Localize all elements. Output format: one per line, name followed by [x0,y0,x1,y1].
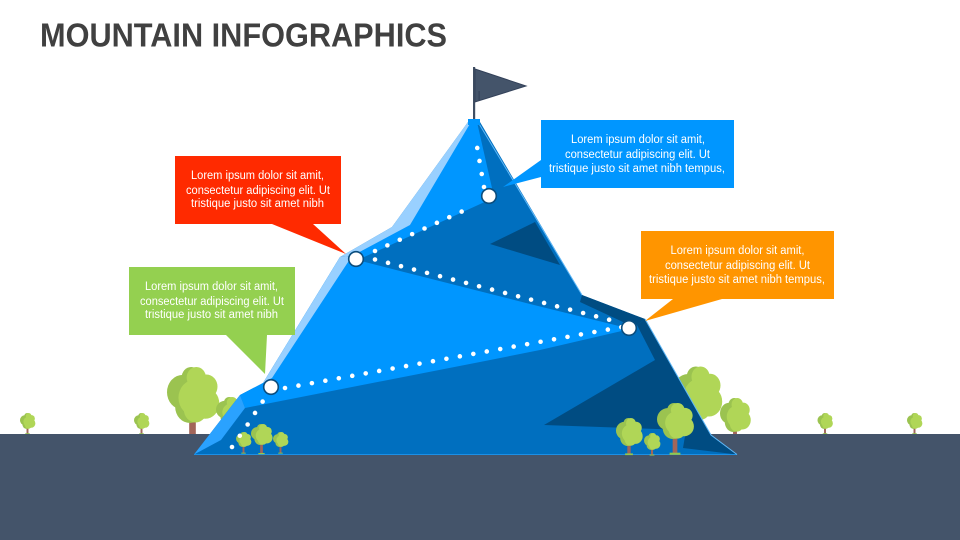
tree: secondary behind mountain left [216,397,245,434]
dotted path [232,135,622,447]
callout: red [175,156,346,254]
summit cap [468,119,480,125]
callout: blue: consectetur adipiscing elit. Ut [565,149,711,161]
callout: blue [503,120,734,188]
tree: far left small [20,413,35,434]
callout: green [129,267,295,374]
callout: blue: tristique justo sit amet nibh tempus, [549,163,725,175]
tree: large behind mountain right [673,366,722,438]
upper bright face [349,122,492,258]
lit right edge [478,122,582,295]
front tree group right [616,403,694,456]
lit lower right edge [645,319,737,454]
ground [0,434,960,540]
flag pole [473,67,475,121]
flag mark [478,91,480,100]
dark lower shadow [544,319,737,454]
callout: orange: consectetur adipiscing elit. Ut [665,260,811,272]
lit base line [194,454,737,456]
middle bright face [240,257,626,408]
callout: red: Lorem ipsum dolor sit amit, [191,170,324,182]
callout: orange: Lorem ipsum dolor sit amit, [670,245,804,257]
callout: orange [641,231,834,321]
lower light sliver [263,256,352,383]
flag cloth [475,69,526,102]
callout: red: consectetur adipiscing elit. Ut [186,185,331,197]
title: MOUNTAIN INFOGRAPHICS [40,16,447,54]
callout: blue: Lorem ipsum dolor sit amit, [571,134,705,146]
callout: orange: tristique justo sit amet nibh tempus, [649,274,825,286]
lower left strip [194,395,245,454]
tree: far right small one [818,413,833,434]
path nodes [264,189,636,394]
mountain [194,122,737,454]
callout: red: tristique justo sit amet nibh [191,198,324,210]
tree: left small [134,413,149,434]
upper light sliver [340,122,471,257]
front tree group left [236,424,288,454]
dark upper shadow [490,222,560,265]
tree: far right small two [907,413,922,434]
callout: green: consectetur adipiscing elit. Ut [140,296,285,308]
callout: green: tristique justo sit amet nibh [145,309,278,321]
callout: green: Lorem ipsum dolor sit amit, [145,281,278,293]
dark ridge band [580,295,645,325]
tree: behind mountain far right [720,398,751,443]
flag [468,67,526,125]
mountain base shape [194,122,737,454]
tree: large behind mountain left [167,367,219,441]
